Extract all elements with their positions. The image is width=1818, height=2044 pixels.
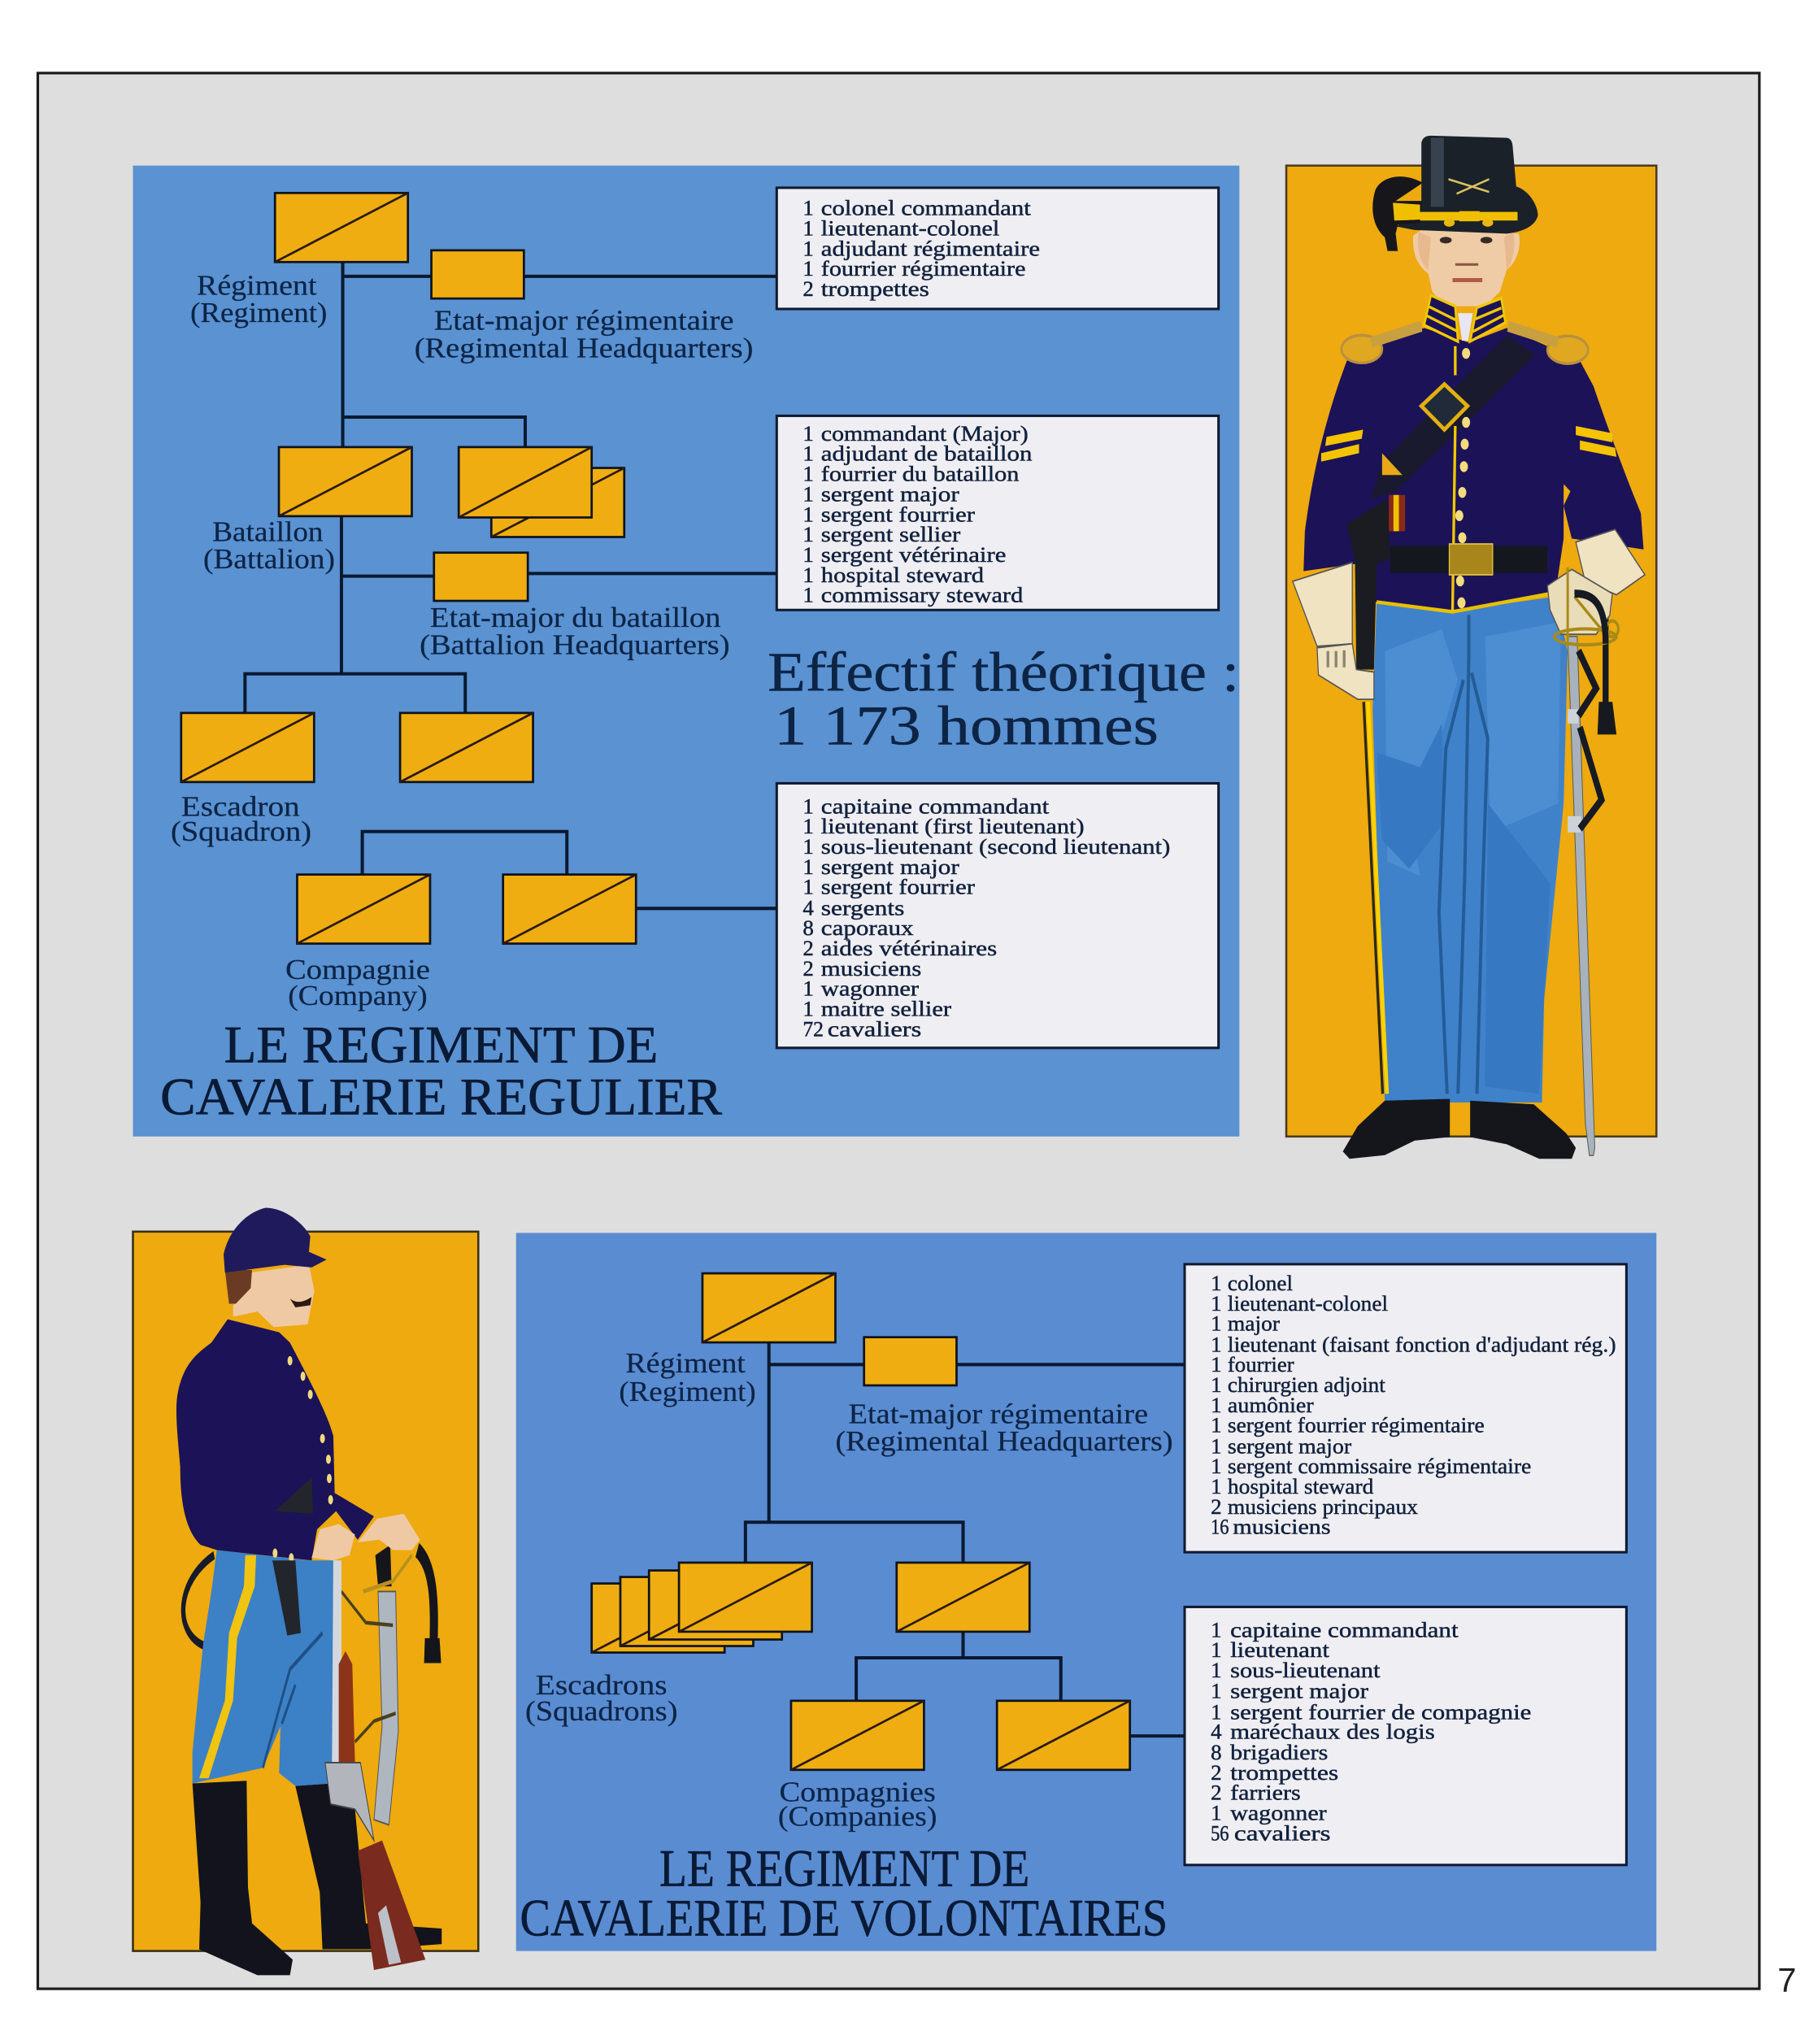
box stack: squadrons (592, 1563, 812, 1653)
carbine (325, 1560, 425, 1970)
arm gap (1555, 484, 1572, 593)
list box: company: caporaux (821, 915, 914, 940)
label: regiment: (Regiment) (619, 1376, 756, 1407)
label: company: (Company) (288, 981, 428, 1011)
list box: company: trompettes (1230, 1760, 1338, 1785)
label: regiment: Régiment (625, 1348, 746, 1379)
theoretical strength heading: 1 173 hommes (774, 694, 1159, 756)
list box: company: sous-lieutenant (1230, 1658, 1381, 1682)
list box: company: 4 (1211, 1719, 1222, 1743)
label: squadrons: Escadrons (536, 1670, 668, 1701)
mustache (290, 1297, 311, 1307)
label: regimental headquarters: (Regimental Headquarters) (415, 333, 753, 363)
list box: regimental headquarters staff: 1 (802, 215, 814, 240)
list box: company: 1 (802, 814, 814, 838)
box: squadron left (181, 713, 314, 782)
title: volunteer cavalry regiment: LE REGIMENT DE (659, 1839, 1029, 1897)
list box: regimental headquarters staff: adjudant régimentaire (821, 236, 1040, 260)
list box: battalion staff: commissary steward (821, 583, 1024, 607)
label: regimental headquarters: Etat-major régimentaire (848, 1398, 1148, 1429)
list box: regimental staff: chirurgien adjoint (1228, 1372, 1385, 1397)
list box: company: 2 (802, 936, 814, 960)
neck and face (1413, 230, 1520, 307)
list box: regimental staff: sergent fourrier régimentaire (1228, 1413, 1485, 1437)
orange background (1286, 166, 1656, 1137)
waist piping (1377, 593, 1554, 612)
list box: regimental staff: hospital steward (1228, 1474, 1374, 1498)
list box: company: sergents (821, 895, 904, 920)
right gauntlet (1547, 529, 1645, 634)
placket (1453, 346, 1455, 611)
list box: regimental staff: 1 (1211, 1454, 1222, 1478)
figure: officer in dress uniform (1293, 136, 1645, 1159)
list box: regimental staff (1185, 1264, 1626, 1552)
list box: battalion staff: sergent sellier (821, 522, 960, 546)
list box: company: 56 (1211, 1820, 1229, 1845)
list box: regimental headquarters staff: 1 (802, 256, 814, 281)
left gauntlet (1293, 563, 1374, 699)
label: squadron: (Squadron) (171, 816, 311, 847)
tunic (176, 1320, 374, 1560)
list box: battalion staff: 1 (802, 583, 814, 607)
waist belt (1390, 546, 1547, 573)
list box: regimental staff: 1 (1211, 1433, 1222, 1458)
buttons (1455, 348, 1470, 608)
box: squadron right (897, 1563, 1029, 1632)
label: regimental headquarters (835, 1398, 1173, 1457)
list box: company: lieutenant (1230, 1637, 1330, 1662)
title: regular cavalry regiment: LE REGIMENT DE (224, 1015, 658, 1073)
list box: battalion staff: adjudant de bataillon (821, 441, 1033, 466)
list box: company: sergent major (821, 855, 959, 879)
title: regular cavalry regiment: CAVALERIE REGULIER (160, 1068, 722, 1126)
box: company left (791, 1701, 924, 1770)
label: battalion headquarters: Etat-major du bataillon (430, 602, 720, 633)
label: squadrons: (Squadrons) (525, 1696, 677, 1727)
holster (272, 1477, 313, 1636)
list box: regimental staff: aumônier (1228, 1393, 1314, 1417)
box: battalion back (491, 468, 624, 537)
label: battalion: Bataillon (212, 516, 324, 547)
list box: company: brigadiers (1230, 1740, 1328, 1764)
kepi (224, 1208, 327, 1272)
list box: company: 1 (1211, 1658, 1222, 1682)
sword knot (1574, 594, 1606, 828)
trouser stripe (199, 1555, 256, 1778)
list box: company: 8 (802, 915, 814, 940)
label: regiment: Régiment (197, 270, 317, 301)
list box: regimental headquarters staff: colonel commandant (821, 196, 1031, 220)
list box: battalion staff: sergent major (821, 481, 959, 506)
list box: battalion staff: 1 (802, 481, 814, 506)
list box: battalion staff: 1 (802, 441, 814, 466)
list box: company: lieutenant (first lieutenant) (821, 814, 1085, 838)
sabre scabbard (374, 1591, 398, 1824)
list box: company: 72 (802, 1016, 824, 1041)
box: regiment (702, 1273, 835, 1342)
label: regiment (190, 270, 327, 328)
list box: regimental staff: 1 (1211, 1332, 1222, 1356)
list box: regimental staff: 1 (1211, 1393, 1222, 1417)
list box: battalion staff: 1 (802, 502, 814, 526)
list box: company: capitaine commandant (821, 794, 1050, 818)
connector lines (245, 262, 776, 908)
list box: battalion staff: commandant (Major) (821, 421, 1029, 446)
list box: regimental staff: 1 (1211, 1372, 1222, 1397)
title: volunteer cavalry regiment: CAVALERIE DE VOLONTAIRES (520, 1889, 1168, 1946)
list box: battalion staff (776, 415, 1219, 610)
label: regimental headquarters: Etat-major régimentaire (434, 306, 733, 337)
list box: regimental headquarters staff: fourrier régimentaire (821, 256, 1026, 281)
box: regimental headquarters (864, 1337, 957, 1385)
panel: volunteer cavalry soldier (133, 1208, 478, 1975)
trouser stripe (1364, 702, 1383, 1094)
plume (1372, 176, 1423, 251)
chains (341, 1591, 396, 1742)
orange background (133, 1232, 478, 1951)
pouch details (1382, 453, 1403, 475)
page number: 7 (1777, 1960, 1796, 1998)
list box: regimental headquarters staff: lieutenant-colonel (821, 215, 999, 240)
box: battalion headquarters (434, 553, 528, 601)
sabre hilt (1554, 568, 1618, 645)
list box: regimental staff: 1 (1211, 1474, 1222, 1498)
label: battalion headquarters (420, 602, 730, 661)
figure: volunteer trooper with carbine (176, 1208, 441, 1975)
list box: battalion staff: sergent fourrier (821, 502, 975, 526)
panel: regular cavalry soldier (1286, 136, 1656, 1159)
list box: regimental staff: major (1228, 1311, 1280, 1336)
strap behind (183, 1555, 214, 1646)
list box: battalion staff: 1 (802, 421, 814, 446)
list box: company (776, 783, 1219, 1048)
label: squadrons (525, 1670, 677, 1727)
list box: company: 1 (1211, 1801, 1222, 1825)
collar (1424, 295, 1505, 341)
list box: company: wagonner (821, 976, 919, 1001)
list box: regimental staff: 1 (1211, 1291, 1222, 1316)
list box: company: sergent fourrier de compagnie (1230, 1699, 1531, 1724)
theoretical strength heading: Effectif théorique : (768, 641, 1239, 703)
label: companies (778, 1777, 937, 1833)
list box: company: 1 (802, 997, 814, 1021)
list box: company: 1 (1211, 1699, 1222, 1724)
list box: regimental staff: colonel (1228, 1271, 1293, 1295)
list box: company: 1 (802, 875, 814, 899)
blue background (133, 166, 1239, 1137)
list box: regimental staff: sergent major (1228, 1433, 1351, 1458)
list box: company: 2 (1211, 1781, 1222, 1805)
list box: regimental staff: 2 (1211, 1494, 1222, 1519)
face (233, 1265, 315, 1327)
list box: regimental staff: lieutenant (faisant fonction d'adjudant rég.) (1228, 1332, 1616, 1356)
list box: company: 1 (1211, 1637, 1222, 1662)
list box: company: maitre sellier (821, 997, 951, 1021)
list box: company: 1 (1211, 1617, 1222, 1642)
hat (1393, 136, 1537, 233)
list box: company: farriers (1230, 1781, 1301, 1805)
list box: battalion staff: sergent vétérinaire (821, 542, 1006, 567)
boots (193, 1781, 441, 1975)
list box: company: 2 (802, 956, 814, 981)
list box: company: musiciens (821, 956, 921, 981)
list box: regimental staff: 1 (1211, 1352, 1222, 1376)
title: regular cavalry regiment (160, 1015, 722, 1126)
label: companies: (Companies) (778, 1802, 937, 1833)
scabbard (1568, 637, 1594, 1155)
chevrons (1321, 426, 1616, 462)
sabre grip and knot (363, 1545, 441, 1663)
label: regimental headquarters (415, 306, 753, 363)
box: company left (297, 875, 430, 944)
shoes (1343, 1099, 1576, 1159)
list box: company: 8 (1211, 1740, 1222, 1764)
list box: company: sergent major (1230, 1679, 1368, 1703)
shoulder belt (1372, 335, 1535, 498)
buttons (272, 1356, 333, 1563)
list box: company: maréchaux des logis (1230, 1719, 1435, 1743)
box: battalion front right (459, 447, 592, 517)
list box: regimental staff: musiciens (1233, 1515, 1331, 1539)
list box: company: 4 (802, 895, 814, 920)
list box: company: sergent fourrier (821, 875, 975, 899)
list box: battalion staff: fourrier du bataillon (821, 462, 1020, 486)
list box: regimental staff: musiciens principaux (1228, 1494, 1418, 1519)
list box: regimental staff: 1 (1211, 1413, 1222, 1437)
label: companies: Compagnies (780, 1777, 936, 1807)
list box: regimental headquarters staff (776, 188, 1219, 309)
list box: company: 1 (1211, 1679, 1222, 1703)
box: company right (503, 875, 636, 944)
list box: regimental headquarters staff: 2 (802, 276, 814, 301)
list box: regimental staff: 1 (1211, 1311, 1222, 1336)
list box: battalion staff: hospital steward (821, 563, 985, 587)
label: regimental headquarters: (Regimental Headquarters) (835, 1426, 1173, 1457)
label: company: Compagnie (285, 955, 430, 985)
box: regimental headquarters (432, 250, 524, 298)
list box: regimental staff: lieutenant-colonel (1228, 1291, 1388, 1316)
label: regiment (619, 1348, 756, 1407)
list box: company: cavaliers (1234, 1820, 1331, 1845)
box: company right (997, 1701, 1130, 1770)
list box: regimental headquarters staff: 1 (802, 196, 814, 220)
list box: regimental staff: 16 (1211, 1515, 1229, 1539)
list box: company: cavaliers (828, 1016, 921, 1041)
box: regiment (275, 193, 408, 262)
list box: company: 1 (802, 976, 814, 1001)
theoretical strength heading (768, 641, 1239, 756)
list box: company: 1 (802, 834, 814, 859)
label: battalion: (Battalion) (203, 544, 335, 575)
list box: company: 2 (1211, 1760, 1222, 1785)
list box: company: capitaine commandant (1230, 1617, 1459, 1642)
panel: volunteer cavalry regiment (516, 1233, 1656, 1951)
list box: company: 1 (802, 794, 814, 818)
belt buckle diamond (1421, 385, 1468, 429)
list box: regimental headquarters staff: 1 (802, 236, 814, 260)
tunic (1303, 328, 1643, 611)
list box: company (1185, 1607, 1626, 1865)
label: regiment: (Regiment) (190, 298, 327, 328)
list box: battalion staff: 1 (802, 522, 814, 546)
label: squadron: Escadron (181, 792, 300, 823)
list box: company: aides vétérinaires (821, 936, 997, 960)
epaulettes (1342, 326, 1588, 363)
list box: battalion staff: 1 (802, 563, 814, 587)
trousers (1372, 597, 1568, 1102)
list box: regimental staff: 1 (1211, 1271, 1222, 1295)
label: battalion headquarters: (Battalion Headquarters) (420, 630, 730, 661)
label: squadron (171, 792, 311, 847)
list box: company: wagonner (1230, 1801, 1327, 1825)
hands (311, 1514, 420, 1560)
panel: regular cavalry regiment (133, 166, 1239, 1137)
list box: company: sous-lieutenant (second lieutenant) (821, 834, 1170, 859)
list box: regimental staff: fourrier (1228, 1352, 1294, 1376)
box: battalion (279, 447, 412, 516)
list box: regimental staff: sergent commissaire régimentaire (1228, 1454, 1531, 1478)
holster (1347, 498, 1390, 669)
box: squadron right (400, 713, 533, 782)
label: company (285, 955, 430, 1011)
trousers (193, 1550, 333, 1786)
connector lines (746, 1342, 1185, 1736)
list box: regimental headquarters staff: trompettes (821, 276, 929, 301)
list box: company: 1 (802, 855, 814, 879)
title: volunteer cavalry regiment (520, 1839, 1168, 1946)
hair (225, 1270, 252, 1304)
label: battalion (203, 516, 335, 575)
blue background (516, 1233, 1656, 1951)
list box: battalion staff: 1 (802, 542, 814, 567)
list box: battalion staff: 1 (802, 462, 814, 486)
